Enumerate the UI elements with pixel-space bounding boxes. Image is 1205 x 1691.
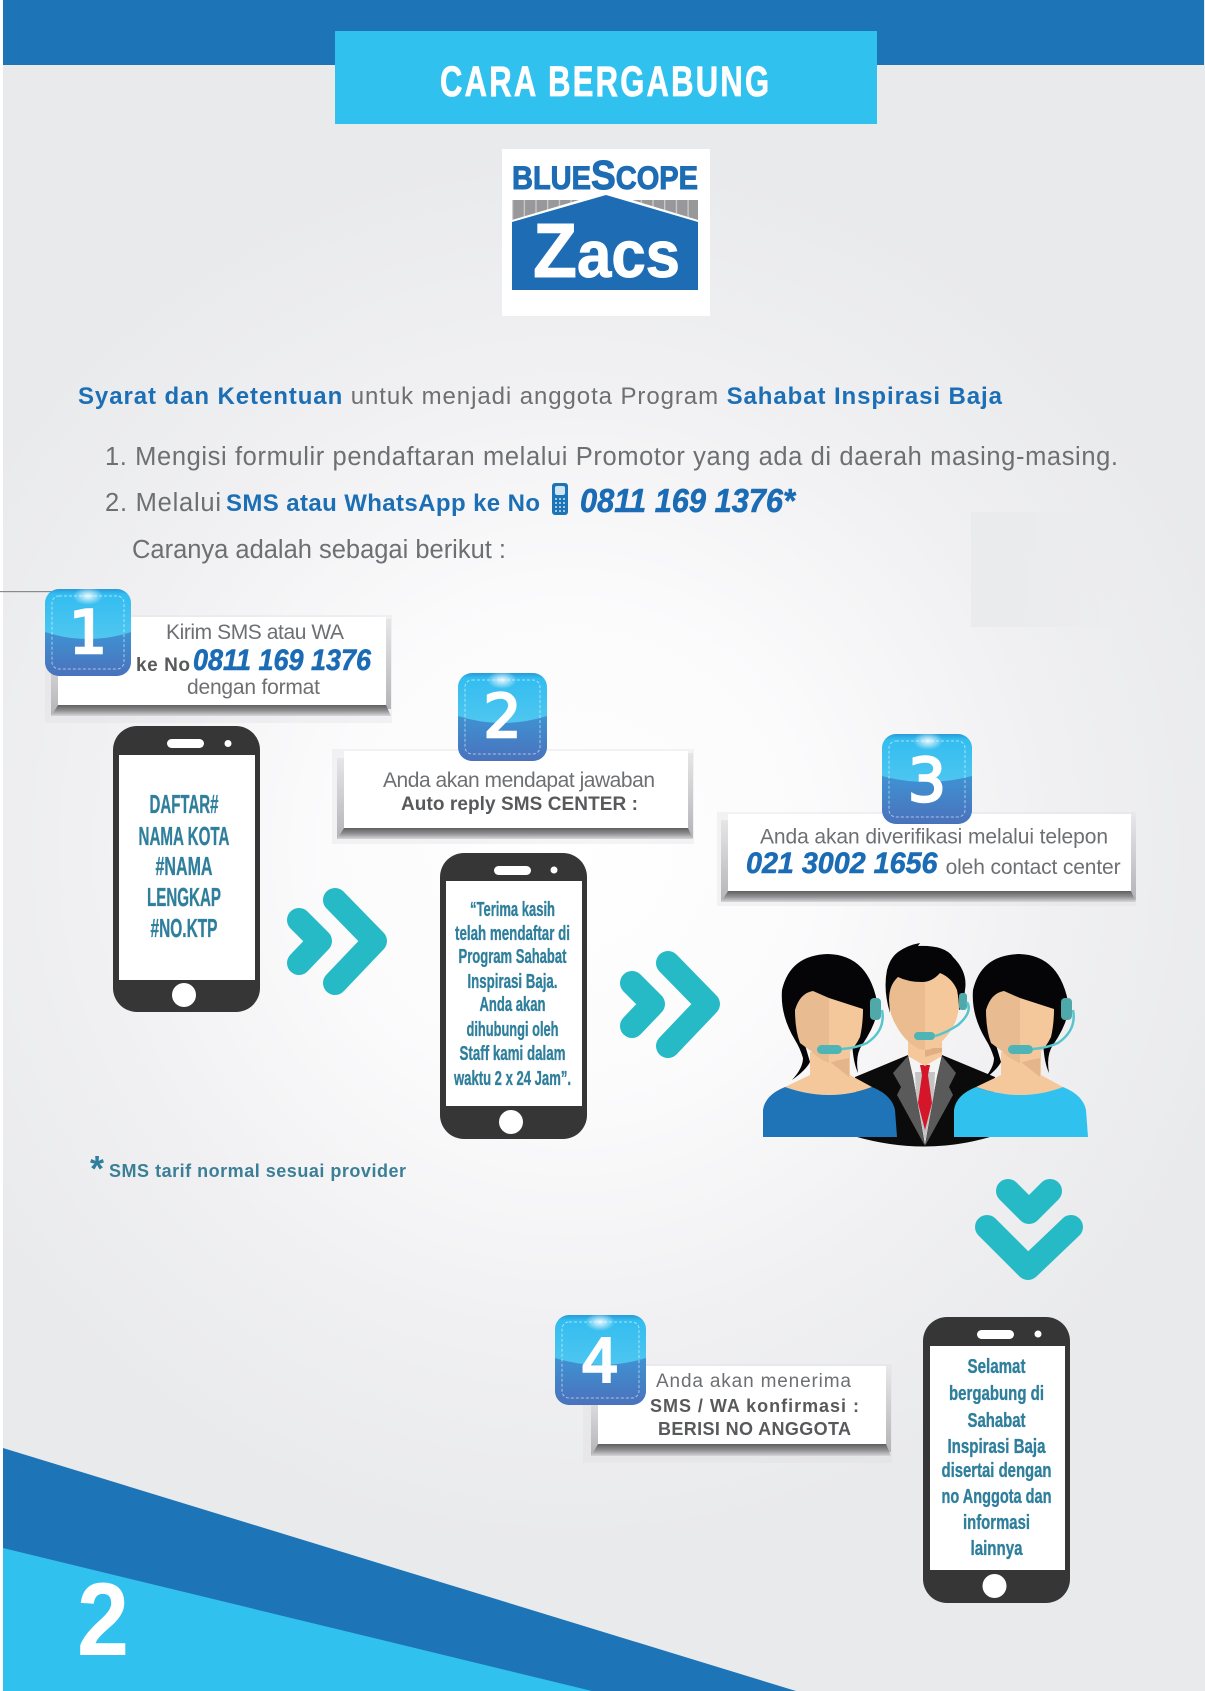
footnote bbox=[90, 1148, 406, 1189]
step 1 card: Kirim SMS atau WA bbox=[166, 621, 344, 644]
step 4 card: BERISI NO ANGGOTA bbox=[658, 1419, 851, 1439]
agent: man bbox=[855, 943, 995, 1146]
phone 3 message: no Anggota dan bbox=[942, 1486, 1052, 1508]
phone 3 message: bergabung di bbox=[949, 1383, 1044, 1405]
phone 2 message: Staff kami dalam bbox=[460, 1043, 566, 1065]
footnote: * bbox=[90, 1148, 104, 1189]
contact center agents illustration bbox=[763, 943, 1088, 1146]
phone 1 message: LENGKAP bbox=[147, 882, 221, 912]
phone 3 message bbox=[942, 1356, 1052, 1560]
phone 2 message: Program Sahabat bbox=[458, 946, 567, 968]
phone 2 message bbox=[453, 899, 571, 1090]
step 1 card bbox=[45, 615, 392, 723]
heading: terms and conditions: Syarat dan Ketentuan untuk menjadi anggota Program Sahabat Inspirasi Baja bbox=[78, 383, 1003, 410]
corner triangle: dark blue bbox=[3, 1448, 796, 1691]
phone 2 bbox=[440, 853, 587, 1139]
phone 2 message: “Terima kasih bbox=[470, 899, 555, 921]
step 2 badge bbox=[458, 671, 547, 761]
phone 3 message: lainnya bbox=[970, 1538, 1023, 1560]
step 4 badge bbox=[555, 1313, 646, 1405]
step 3 card bbox=[717, 812, 1136, 906]
phone 1 message: DAFTAR# bbox=[150, 789, 219, 819]
step 3 card: oleh contact center bbox=[946, 856, 1121, 879]
phone 2 message: Anda akan bbox=[480, 994, 546, 1016]
step 1 badge: 1 bbox=[69, 598, 107, 668]
phone 3 message: disertai dengan bbox=[942, 1460, 1052, 1482]
list item 2: 0811 169 1376* bbox=[580, 482, 797, 519]
title banner bbox=[335, 31, 877, 124]
arrow: step 3 to step 4 bbox=[987, 1191, 1071, 1268]
top header bar bbox=[3, 0, 1204, 65]
phone 1 message bbox=[138, 789, 230, 943]
step 1 card: ke No bbox=[136, 655, 190, 676]
step 4 badge: 4 bbox=[581, 1327, 619, 1397]
step 4 card: SMS / WA konfirmasi : bbox=[650, 1396, 859, 1416]
step 1 badge bbox=[45, 587, 131, 676]
arrow: step 2 to step 3 bbox=[632, 963, 708, 1046]
step 2 card bbox=[332, 749, 694, 844]
phone 2 message: dihubungi oleh bbox=[466, 1019, 558, 1041]
phone 3 message: Sahabat bbox=[968, 1410, 1026, 1432]
phone 3 bbox=[923, 1317, 1070, 1603]
step 4 card: Anda akan menerima bbox=[656, 1371, 851, 1392]
step 3 card: 021 3002 1656 bbox=[746, 847, 938, 880]
logo: BlueScope Zacs bbox=[502, 149, 710, 316]
phone 3 message: Selamat bbox=[968, 1356, 1026, 1378]
list item 2 bbox=[105, 482, 797, 519]
step 3 card: Anda akan diverifikasi melalui telepon bbox=[760, 826, 1108, 848]
phone 1 bbox=[113, 726, 260, 1012]
page number: 2 bbox=[77, 1562, 129, 1678]
icon: handset bbox=[552, 483, 568, 515]
phone 2 message: waktu 2 x 24 Jam”. bbox=[453, 1068, 571, 1090]
list item 1: 1. Mengisi formulir pendaftaran melalui Promotor yang ada di daerah masing-masing. bbox=[105, 443, 1118, 471]
step 4 card bbox=[583, 1364, 892, 1463]
step 2 card: Auto reply SMS CENTER : bbox=[401, 794, 638, 815]
logo: BlueScope Zacs: Zacs bbox=[533, 208, 680, 294]
agent: woman left bbox=[763, 954, 897, 1137]
footnote: SMS tarif normal sesuai provider bbox=[109, 1161, 406, 1181]
agent: woman right bbox=[954, 954, 1088, 1137]
step 1 card: 0811 169 1376 bbox=[193, 644, 371, 677]
phone 3 message: informasi bbox=[963, 1512, 1030, 1534]
phone 1 message: #NO.KTP bbox=[150, 913, 218, 943]
list item 2: SMS atau WhatsApp ke No bbox=[226, 490, 540, 517]
corner triangle: light blue bbox=[3, 1548, 592, 1691]
arrow: step 1 to step 2 bbox=[299, 900, 375, 983]
step 3 badge: 3 bbox=[908, 746, 946, 816]
list item 2: 2. Melalui bbox=[105, 489, 221, 517]
list follow-up text: Caranya adalah sebagai berikut : bbox=[132, 536, 506, 564]
phone 3 message: Inspirasi Baja bbox=[948, 1436, 1046, 1458]
step 1 card: dengan format bbox=[187, 676, 320, 699]
step 3 badge bbox=[882, 732, 972, 824]
title: CARA BERGABUNG bbox=[440, 57, 769, 105]
phone 1 message: #NAMA bbox=[156, 851, 213, 881]
step 2 badge: 2 bbox=[483, 682, 522, 752]
step 2 card: Anda akan mendapat jawaban bbox=[383, 769, 655, 792]
phone 1 message: NAMA KOTA bbox=[138, 821, 230, 851]
phone 2 message: telah mendaftar di bbox=[455, 923, 570, 945]
phone 2 message: Inspirasi Baja. bbox=[468, 971, 558, 993]
logo: BlueScope Zacs: BLUESCOPE bbox=[512, 152, 698, 198]
